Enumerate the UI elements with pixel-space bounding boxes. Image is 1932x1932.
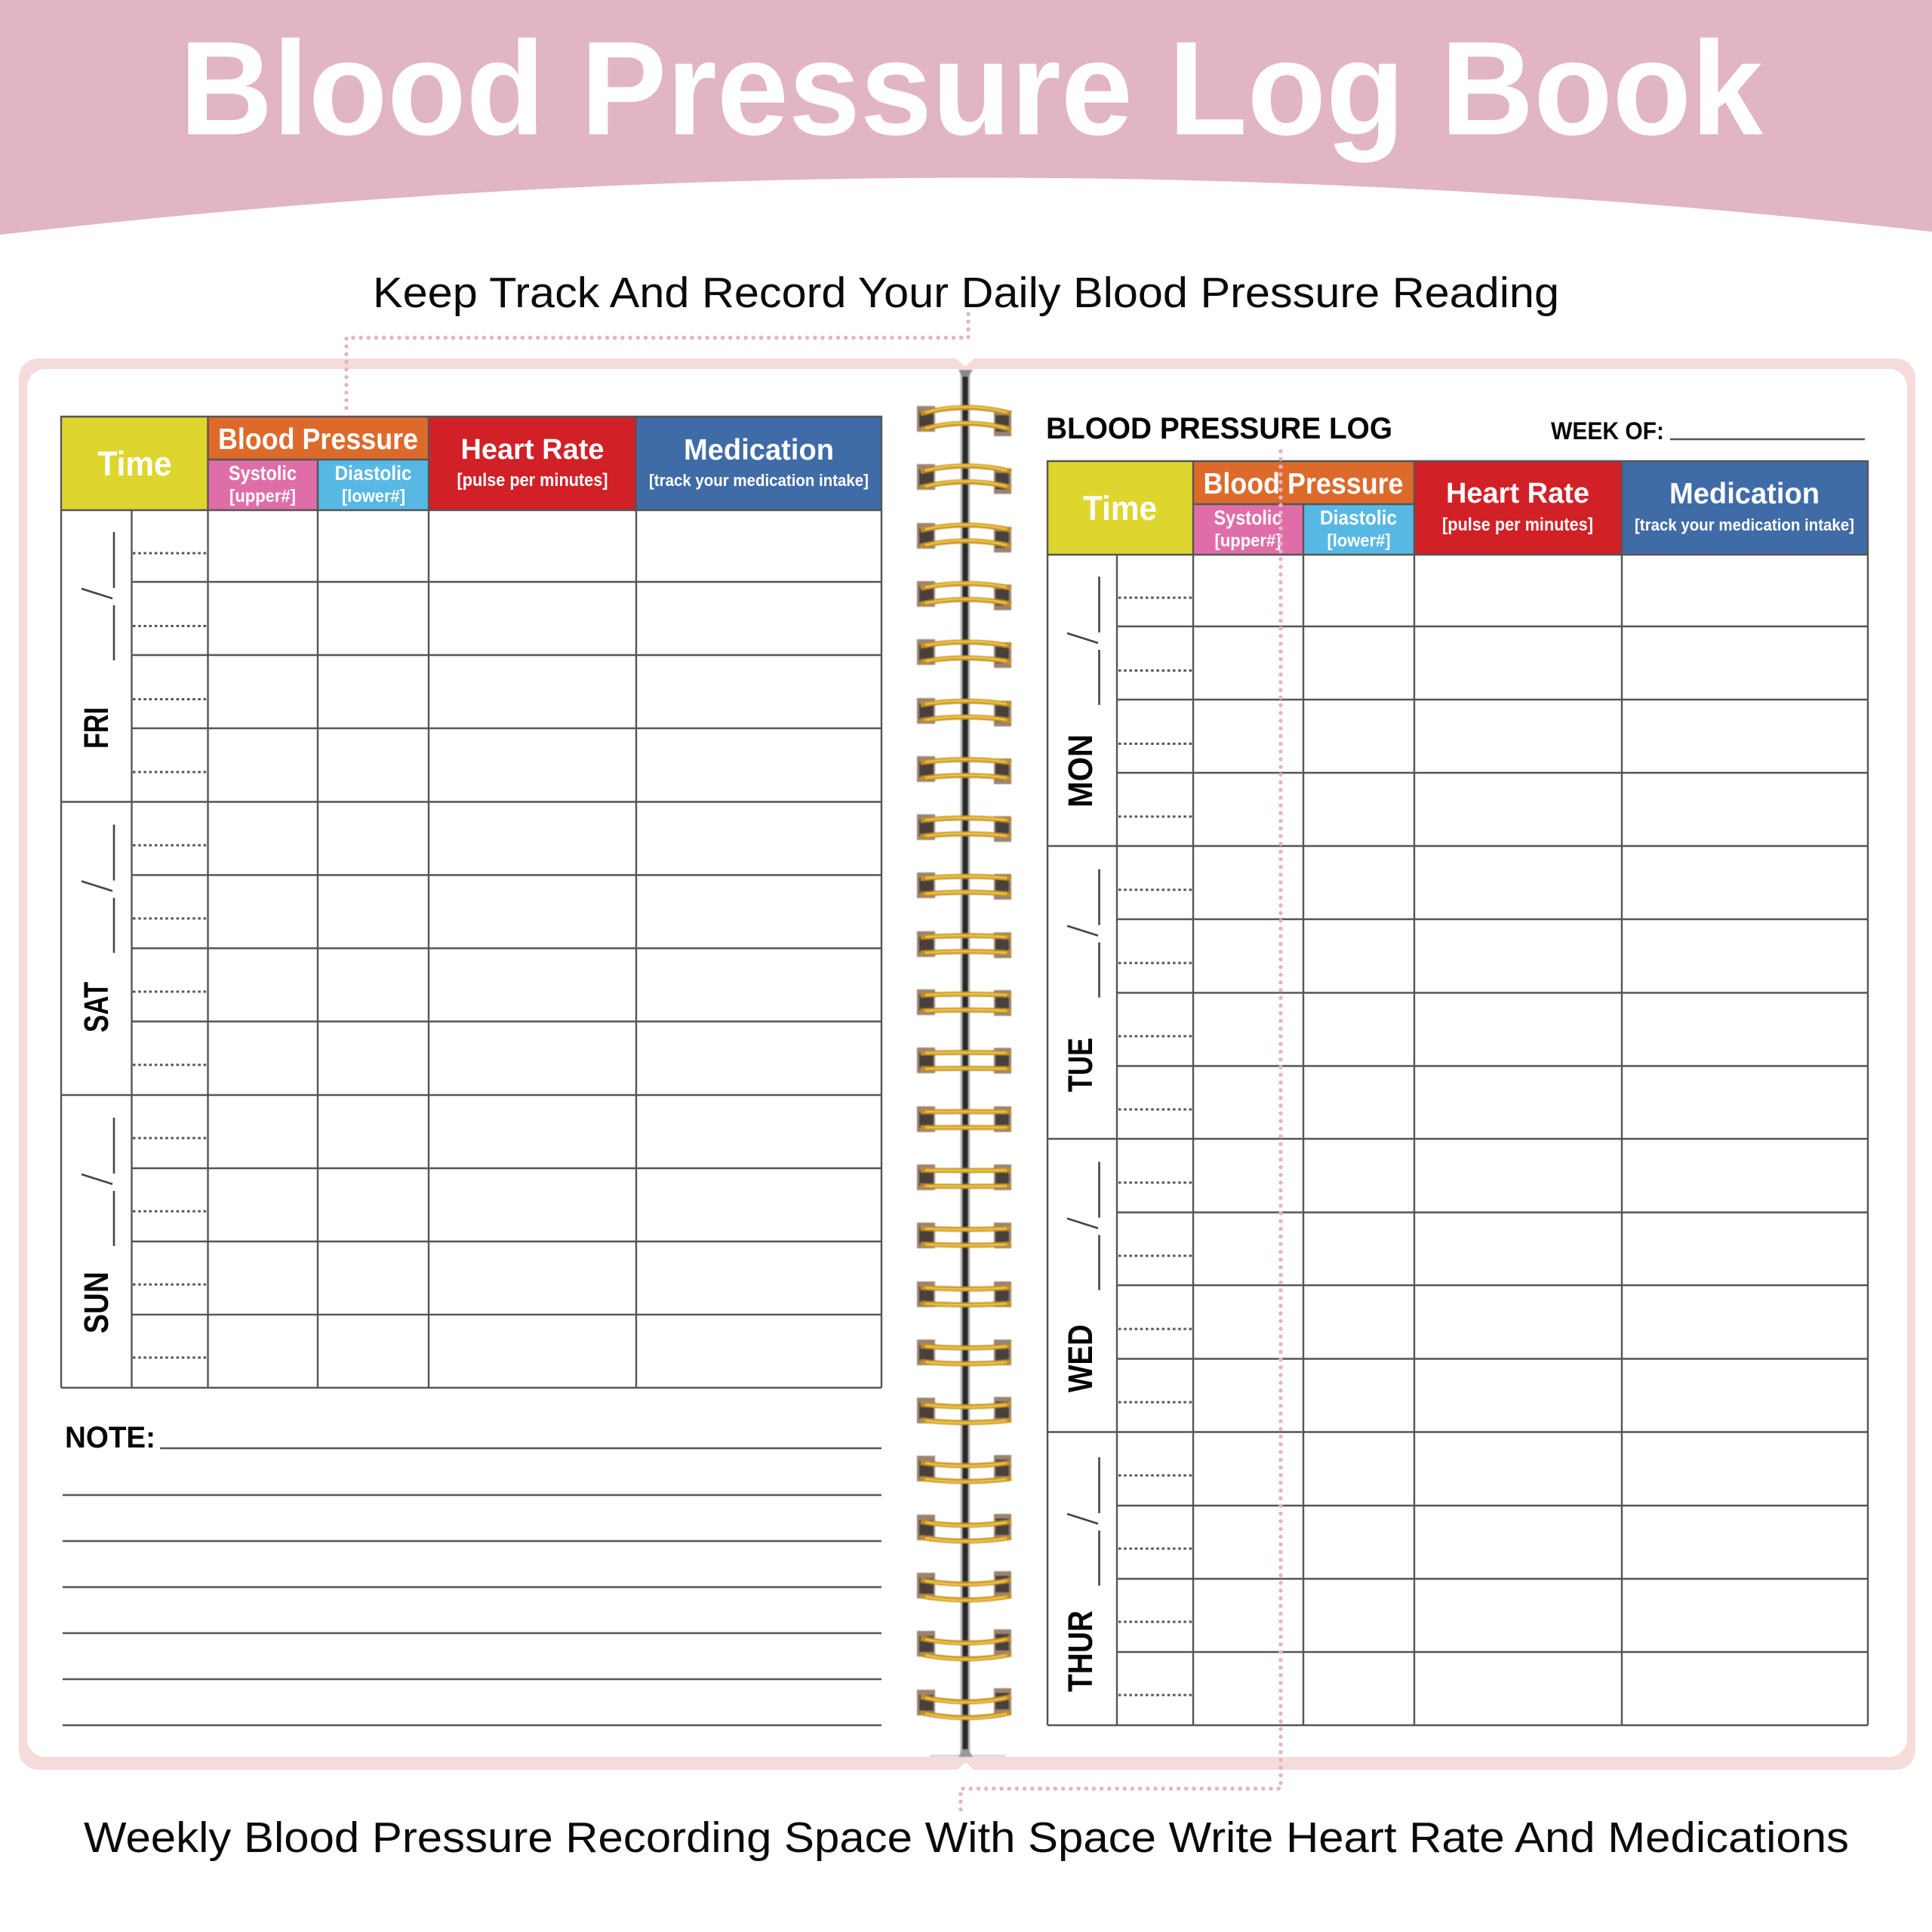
day: TUE [1061, 869, 1100, 1092]
left table header: Blood Pressure [218, 423, 418, 456]
day: SUN [77, 1118, 115, 1334]
ring 19 [917, 1455, 1011, 1481]
ring 22 [917, 1629, 1011, 1660]
left table header [61, 417, 881, 510]
title: Blood Pressure Log Book [180, 14, 1764, 163]
day: MON [1061, 577, 1100, 808]
ring 5 [917, 639, 1011, 668]
ring 10 [917, 931, 1011, 958]
day: THUR: THUR [1061, 1611, 1100, 1692]
ring 1 [917, 406, 1011, 436]
left page log table [61, 417, 881, 1388]
day: TUE: TUE [1061, 1038, 1100, 1092]
ring 6 [917, 698, 1011, 726]
ring 2 [917, 464, 1011, 494]
left table header: Medication [684, 434, 834, 466]
ring 9 [917, 872, 1011, 900]
ring 21 [917, 1571, 1011, 1601]
note lines [63, 1448, 881, 1725]
day: SAT: SAT [77, 982, 115, 1032]
left table grid [61, 510, 881, 1388]
ring 14 [917, 1164, 1011, 1190]
ring 12 [917, 1048, 1011, 1073]
right table header: Systolic [1214, 506, 1281, 529]
right table header: [lower#] [1327, 531, 1390, 550]
day: WED [1061, 1162, 1100, 1392]
ring 13 [917, 1106, 1011, 1132]
left table header: [lower#] [342, 486, 405, 506]
week of field: WEEK OF: [1551, 417, 1664, 445]
right table header: [upper#] [1215, 531, 1281, 550]
right table header: Heart Rate [1446, 478, 1589, 509]
left table header: [track your medication intake] [649, 471, 869, 490]
ring 18 [917, 1397, 1011, 1423]
left table header: [pulse per minutes] [457, 470, 608, 491]
right table dotted time lines [1118, 598, 1193, 1695]
ring 23 [917, 1688, 1011, 1718]
day: SUN: SUN [77, 1272, 115, 1334]
day: THUR [1061, 1457, 1100, 1692]
right table header: [pulse per minutes] [1442, 515, 1593, 535]
ring 11 [917, 989, 1011, 1016]
left table dotted time lines [133, 553, 208, 1358]
note section [63, 1421, 881, 1725]
day: WED: WED [1061, 1324, 1100, 1392]
day: FRI [77, 532, 115, 749]
note label: NOTE: [65, 1421, 155, 1454]
right page heading: BLOOD PRESSURE LOG [1046, 412, 1392, 445]
ring 7 [917, 756, 1011, 784]
title banner [0, 0, 1932, 235]
ring 4 [917, 581, 1011, 610]
left table header: [upper#] [229, 486, 296, 506]
left table header: Heart Rate [460, 434, 604, 466]
callout connector: top subtitle to left table [346, 314, 968, 411]
right table header: [track your medication intake] [1635, 515, 1854, 534]
ring 15 [917, 1223, 1011, 1248]
ring 20 [917, 1514, 1011, 1541]
day: SAT [77, 825, 115, 1032]
right page log table [1048, 461, 1868, 1725]
ring 16 [917, 1281, 1011, 1307]
ring 17 [917, 1340, 1011, 1365]
callout connector: right table to bottom caption [961, 451, 1281, 1810]
ring 8 [917, 814, 1011, 842]
left table header: Systolic [229, 462, 297, 485]
left table header: Time [98, 445, 172, 483]
ring 3 [917, 523, 1011, 552]
day: MON: MON [1061, 734, 1100, 808]
right table header: Medication [1669, 478, 1820, 510]
right table grid [1048, 555, 1868, 1725]
spiral binding [917, 370, 1011, 1757]
right table header: Time [1083, 489, 1157, 528]
right table header [1048, 461, 1868, 555]
right table header: Blood Pressure [1203, 468, 1404, 500]
right table header: Diastolic [1320, 506, 1397, 529]
subtitle: Keep Track And Record Your Daily Blood Pressure Reading [373, 269, 1559, 317]
day: FRI: FRI [77, 707, 115, 749]
notebook frame [19, 358, 1915, 1770]
left table header: Diastolic [335, 462, 412, 485]
bottom caption: Weekly Blood Pressure Recording Space With Space Write Heart Rate And Medications [84, 1814, 1849, 1862]
